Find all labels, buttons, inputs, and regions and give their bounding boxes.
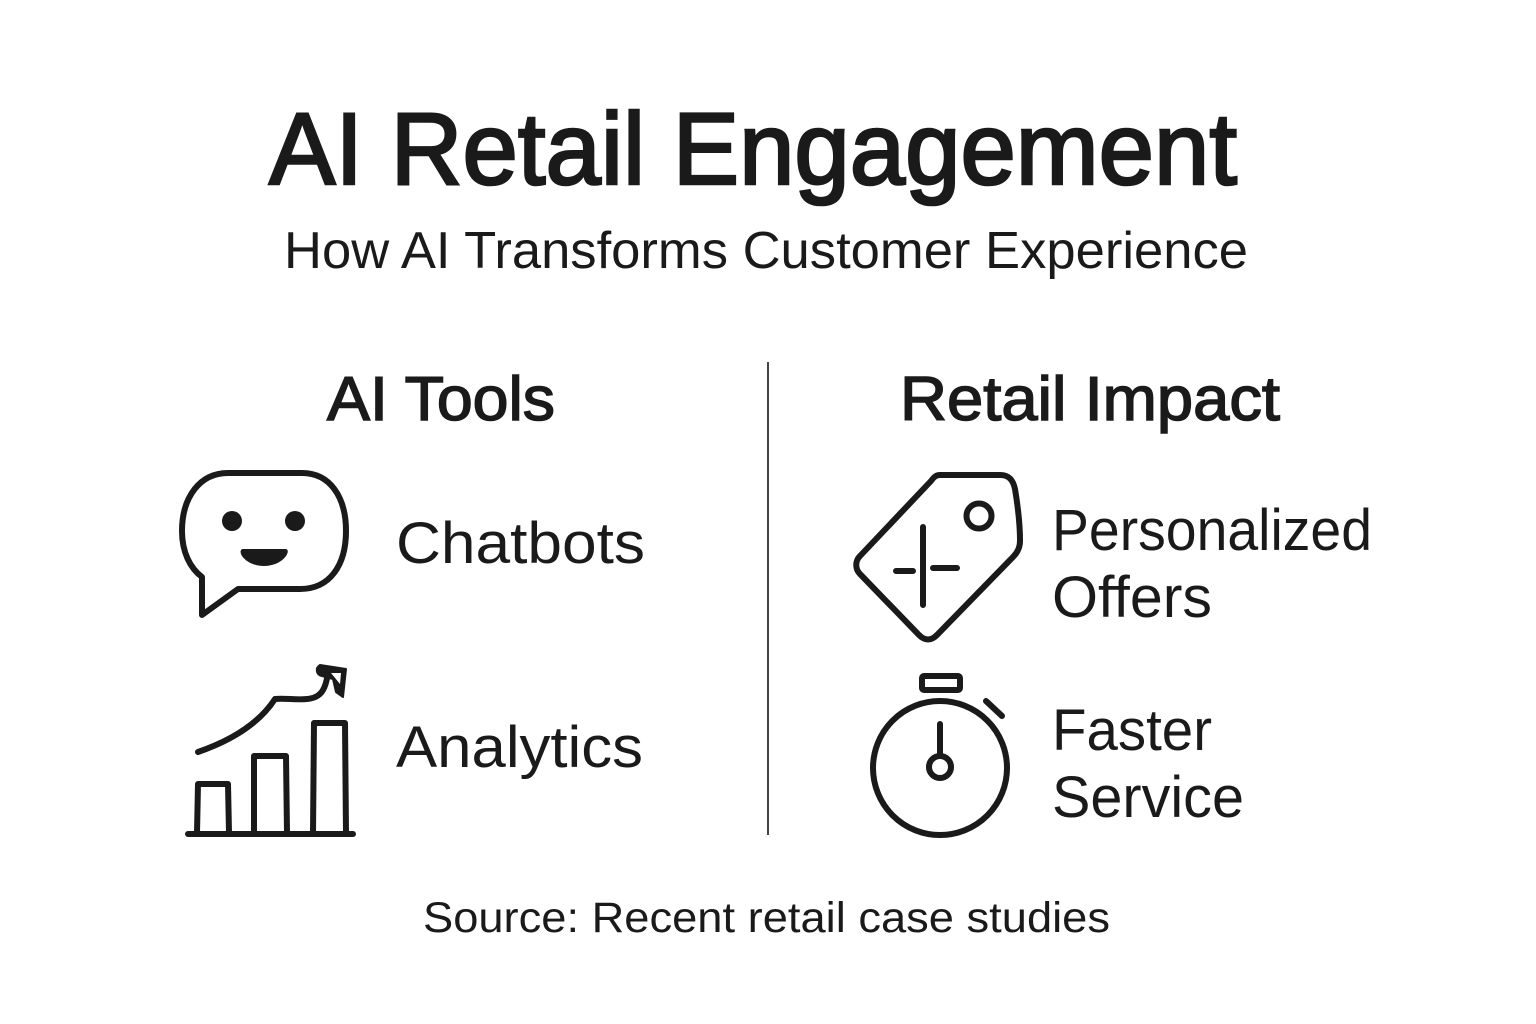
icon: price tag xyxy=(856,475,1020,640)
heading: AI Tools: AI Tools xyxy=(327,365,555,434)
panel: Retail Impact xyxy=(856,365,1372,835)
icon: chatbot speech bubble xyxy=(182,473,346,615)
label: Personalized Offers: Offers xyxy=(1052,565,1212,630)
label: Analytics: Analytics xyxy=(396,715,643,780)
panel: AI Tools xyxy=(182,365,645,834)
label: Personalized Offers xyxy=(1052,498,1372,630)
heading: Retail Impact: Retail Impact xyxy=(900,365,1280,434)
label: Faster Service: Service xyxy=(1052,765,1244,830)
label: Chatbots: Chatbots xyxy=(396,511,645,576)
source note: Source: Recent retail case studies xyxy=(423,894,1110,942)
label: Personalized Offers: Personalized xyxy=(1052,498,1372,563)
subtitle: How AI Transforms Customer Experience xyxy=(284,222,1248,280)
icon: analytics bar chart with arrow xyxy=(188,665,353,834)
label: Faster Service xyxy=(1052,698,1244,830)
icon: stopwatch xyxy=(873,676,1007,835)
title: AI Retail Engagement xyxy=(269,92,1237,206)
label: Faster Service: Faster xyxy=(1052,698,1212,763)
